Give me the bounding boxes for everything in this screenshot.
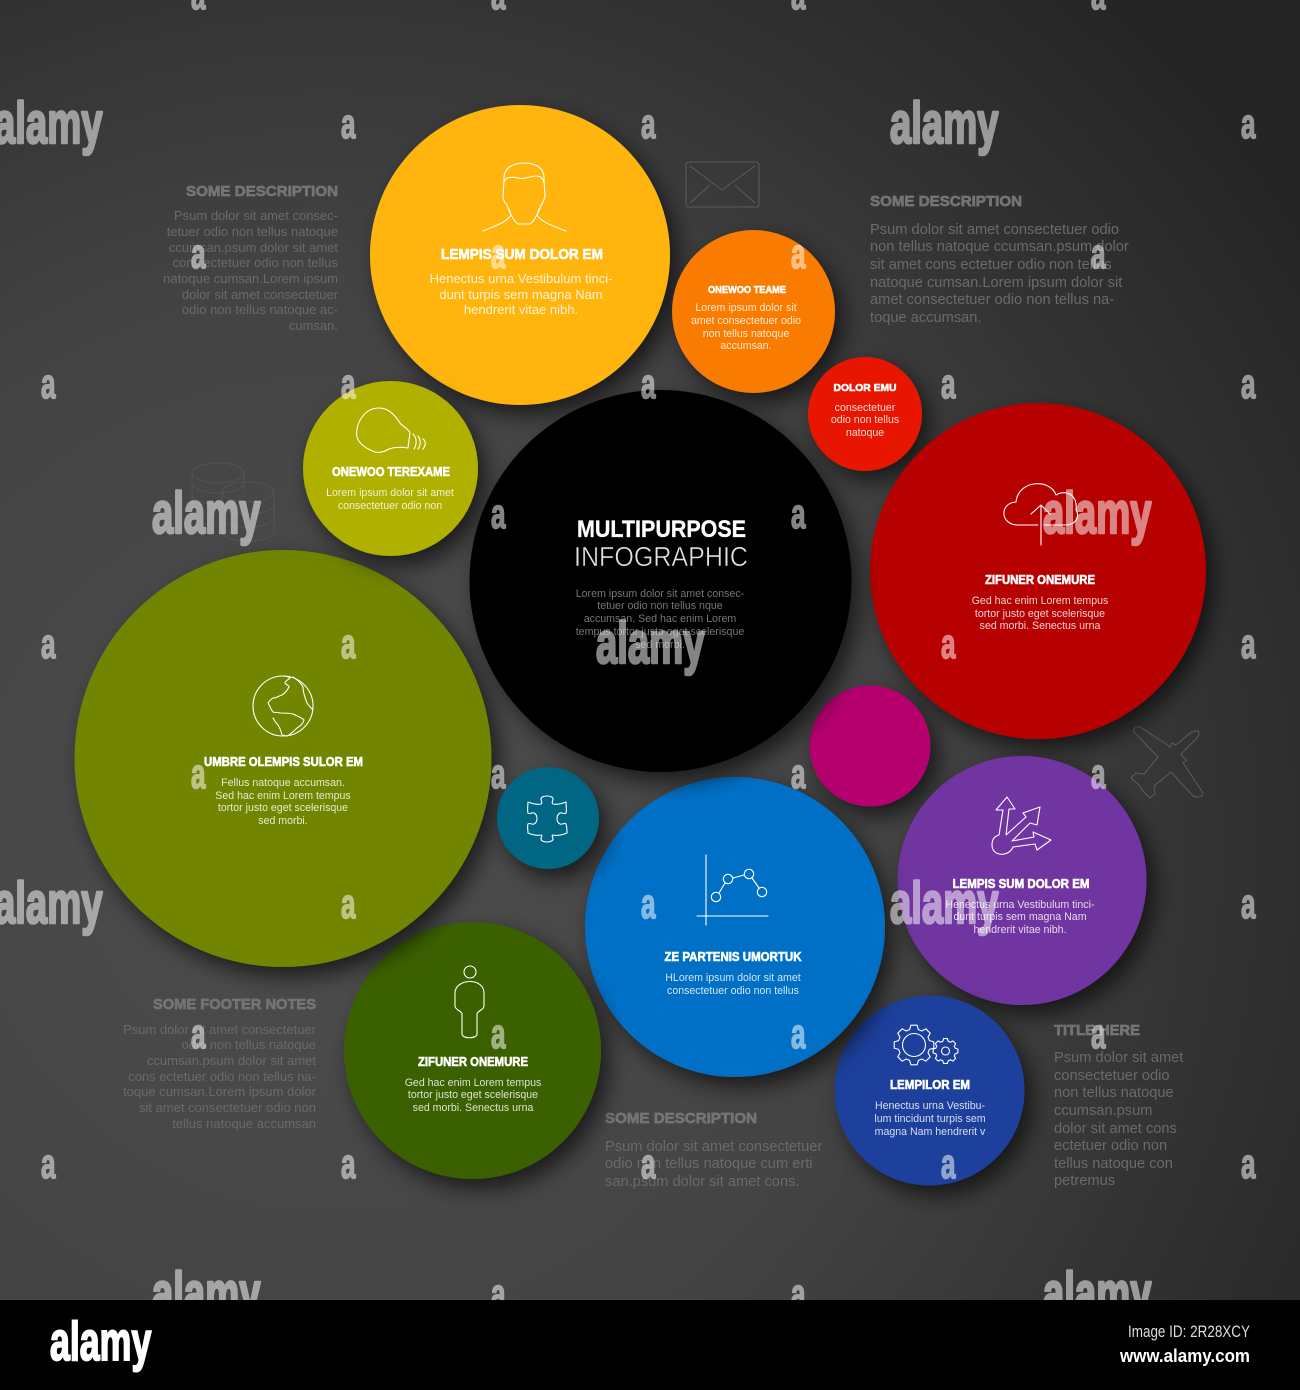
body text: Ged hac enim Lorem tempus [972,595,1108,607]
icon: gears [894,1025,958,1065]
watermark: repeated stock logos: a [941,361,956,408]
body text: odio non tellus natoque [182,1037,316,1052]
panel: navy circle [834,996,1024,1186]
panel: orange circle [672,230,835,393]
watermark: repeated stock logos: a [641,101,656,148]
body text: Henectus urna Vestibu- [875,1100,986,1112]
panel: teal circle [497,767,599,869]
icon: airplane [1131,727,1203,798]
watermark: repeated stock logos: a [341,621,356,668]
watermark: repeated stock logos: alamy [890,872,999,936]
panel: large green circle [74,550,492,967]
body text: odio non tellus natoque ac- [182,302,338,317]
body text [163,208,339,333]
body text: tortor justo eget scelerisque [218,802,348,814]
body text: petremus [1054,1173,1115,1189]
body text: Henectus urna Vestibulum tinci- [430,271,612,286]
body text [972,595,1108,632]
watermark: repeated stock logos: a [191,1011,206,1058]
watermark: repeated stock logos: a [641,881,656,928]
footer bar [0,1300,1300,1390]
body text: ccumsan.psum dolor sit amet [169,240,338,255]
watermark: repeated stock logos: a [791,751,806,798]
heading: ONEWOO TEAME [708,284,786,296]
body text: non tellus natoque [1054,1085,1174,1101]
watermark: repeated stock logos: a [41,621,56,668]
body text: Sed hac enim Lorem tempus [215,790,351,802]
body text [870,222,1129,326]
body text: odio non tellus natoque cum erti [605,1156,813,1172]
watermark: repeated stock logos: a [491,491,506,538]
body text: Fellus natoque accumsan. [221,777,345,789]
body text: dunt turpis sem magna Nam [953,911,1087,923]
body text: ccumsan.psum dolor sit amet [147,1053,316,1068]
body text: Psum dolor sit amet [1054,1050,1183,1066]
body text: dolor sit amet cons [1054,1121,1177,1137]
icon: puzzle piece [528,796,567,842]
body text: magna Nam hendrerit v [875,1126,986,1138]
watermark: repeated stock logos: a [641,1141,656,1188]
watermark: repeated stock logos: alamy [1043,1262,1152,1326]
watermark: repeated stock logos: a [1241,621,1256,668]
body text: tetuer odio non tellus natoque [167,224,338,239]
body text: consectetuer odio non [338,500,442,512]
heading: LEMPILOR EM [890,1078,970,1092]
body text: consectetuer odio [1054,1068,1170,1084]
body text: san.psum dolor sit amet cons. [605,1174,799,1190]
icon: cloud upload [1004,484,1078,545]
body text: Henectus urna Vestibulum tinci- [946,899,1095,911]
heading: SOME DESCRIPTION [186,183,338,200]
watermark: repeated stock logos: a [1241,101,1256,148]
watermark: repeated stock logos: a [1091,231,1106,278]
text block: title here [1054,1022,1183,1189]
watermark: repeated stock logos: alamy [596,612,705,676]
body text: natoque [846,427,884,439]
heading: ZIFUNER ONEMURE [418,1055,528,1069]
icon: line chart [697,855,768,925]
body text: Psum dolor sit amet consec- [174,208,338,223]
body text [215,777,351,827]
watermark: repeated stock logos: alamy [1043,482,1152,546]
body text: cons ectetuer odio non tellus [172,255,338,270]
heading: ZE PARTENIS UMORTUK [664,950,802,964]
watermark: repeated stock logos: a [191,751,206,798]
body text: consectetuer [835,402,896,414]
footer logo: alamy [50,1310,152,1372]
watermark: repeated stock logos: a [791,1011,806,1058]
body text: HLorem ipsum dolor sit amet [665,972,801,984]
body text: sed morbi. Senectus urna [980,620,1100,632]
text block: some description right [870,193,1129,326]
text block: some description bottom [605,1110,822,1190]
body text: tortor justo eget scelerisque [408,1089,538,1101]
body text: sit amet cons ectetuer odio non tellus [870,257,1112,273]
panel: central black circle [470,390,852,772]
body text: tortor justo eget scelerisque [975,608,1105,620]
heading: LEMPIS SUM DOLOR EM [952,877,1090,891]
body text: Ged hac enim Lorem tempus [405,1077,541,1089]
watermark: repeated stock logos: a [341,101,356,148]
panel: yellow circle [370,105,670,405]
watermark: repeated stock logos: a [41,361,56,408]
body text: tetuer odio non tellus nque [597,600,723,612]
watermark: repeated stock logos: a [491,1011,506,1058]
watermark: repeated stock logos: a [341,881,356,928]
watermark: repeated stock logos: a [641,361,656,408]
panel: olive circle [303,381,478,556]
body text: sed morbi. [258,815,308,827]
panel: magenta circle [810,686,930,806]
watermark: repeated stock logos: a [1241,881,1256,928]
heading: SOME DESCRIPTION [870,193,1022,210]
body text: toque accumsan. [870,310,982,326]
body text: amet consectetuer odio non tellus na- [870,292,1114,308]
watermark: repeated stock logos: a [341,1141,356,1188]
body text: toque cumsan.Lorem ipsum dolor [123,1084,317,1099]
body text [430,271,612,317]
text block: some description left [163,183,339,333]
watermark: repeated stock logos: a [491,231,506,278]
watermark: repeated stock logos: a [1091,1011,1106,1058]
heading: ZIFUNER ONEMURE [985,573,1095,587]
image id: Image ID: 2R28XCY [1128,1322,1250,1341]
heading: ONEWOO TEREXAME [332,465,450,479]
body text: non tellus natoque ccumsan.psum dolor [870,239,1129,255]
panel: purple circle [898,756,1146,1005]
body text [123,1022,317,1131]
heading: DOLOR EMU [834,382,896,394]
watermark: repeated stock logos: a [941,621,956,668]
watermark: repeated stock logos: a [791,1271,806,1318]
body text: cons ectetuer odio non tellus na- [128,1069,316,1084]
body text: non tellus natoque [703,328,789,340]
watermark: repeated stock logos: a [1091,751,1106,798]
body text: ccumsan.psum [1054,1103,1152,1119]
body text: hendrerit vitae nibh. [464,302,578,317]
watermark: repeated stock logos: alamy [890,92,999,156]
title: MULTIPURPOSE [577,516,746,543]
watermark: repeated stock logos: a [791,491,806,538]
body text [1054,1050,1183,1189]
body text: Lorem ipsum dolor sit amet [326,487,454,499]
body text [576,588,745,651]
website: www.alamy.com [1119,1346,1250,1366]
body text [874,1100,986,1138]
body text: sed morbi. Senectus urna [413,1102,533,1114]
body text [831,402,899,439]
heading: TITLE HERE [1054,1022,1140,1039]
watermark: repeated stock logos: a [791,231,806,278]
body text: Psum dolor sit amet consectetuer [605,1139,822,1155]
watermark: repeated stock logos: a [1241,1141,1256,1188]
body text [665,972,801,997]
icon: globe [253,676,313,736]
heading: UMBRE OLEMPIS SULOR EM [204,755,363,769]
icon: light bulb [357,408,425,452]
body text: consectetuer odio non tellus [667,985,799,997]
icon: envelope [686,162,759,207]
watermark: repeated stock logos: a [491,1271,506,1318]
watermark: repeated stock logos: a [491,751,506,798]
panel: dark green circle [344,922,601,1179]
body text: Lorem ipsum dolor sit [695,302,797,314]
watermark: repeated stock logos: alamy [152,482,261,546]
body text: accumsan. [720,340,772,352]
body text [605,1139,822,1190]
watermark: repeated stock logos: a [1241,361,1256,408]
body text [946,899,1095,936]
icon: person [455,966,484,1038]
body text: sit amet consectetuer odio non [139,1100,316,1115]
body text: odio non tellus [831,414,899,426]
body text: cumsan. [289,318,338,333]
body text: Psum dolor sit amet consectetuer [123,1022,317,1037]
heading: SOME FOOTER NOTES [153,996,316,1013]
body text: dunt turpis sem magna Nam [439,287,603,302]
watermark: repeated stock logos: a [341,361,356,408]
body text: lum tincidunt turpis sem [874,1113,986,1125]
icon: head and shoulders [483,163,566,231]
body text: Psum dolor sit amet consectetuer odio [870,222,1119,238]
text block: footer notes [123,996,317,1131]
heading: LEMPIS SUM DOLOR EM [441,247,603,263]
watermark: repeated stock logos: a [941,1141,956,1188]
icon: coins [192,463,274,541]
panel: dark red circle [870,403,1206,739]
body text [691,302,801,352]
panel: blue circle [585,777,885,1077]
watermark: repeated stock logos: a [41,1141,56,1188]
heading: SOME DESCRIPTION [605,1110,757,1127]
watermark: repeated stock logos: a [191,231,206,278]
body text: tellus natoque con [1054,1156,1173,1172]
body text [405,1077,541,1114]
body text: ectetuer odio non [1054,1138,1167,1154]
watermark: repeated stock logos: alamy [152,1262,261,1326]
body text: natoque cumsan.Lorem ipsum dolor sit [870,275,1122,291]
body text: dolor sit amet consectetuer [182,287,339,302]
body text: accumsan. Sed hac enim Lorem [584,613,736,625]
body text: hendrerit vitae nibh. [973,924,1067,936]
body text: amet consectetuer odio [691,315,801,327]
icon: split arrows [992,797,1051,854]
body text: tempus tortor justo eget scelerisque [576,626,744,638]
body text: tellus natoque accumsan [172,1116,316,1131]
panel: small red circle [808,357,922,471]
body text: natoque cumsan.Lorem ipsum [163,271,338,286]
body text [326,487,454,512]
subtitle: INFOGRAPHIC [574,541,748,572]
body text: sed morbi. [635,639,685,651]
body text: Lorem ipsum dolor sit amet consec- [576,588,745,600]
